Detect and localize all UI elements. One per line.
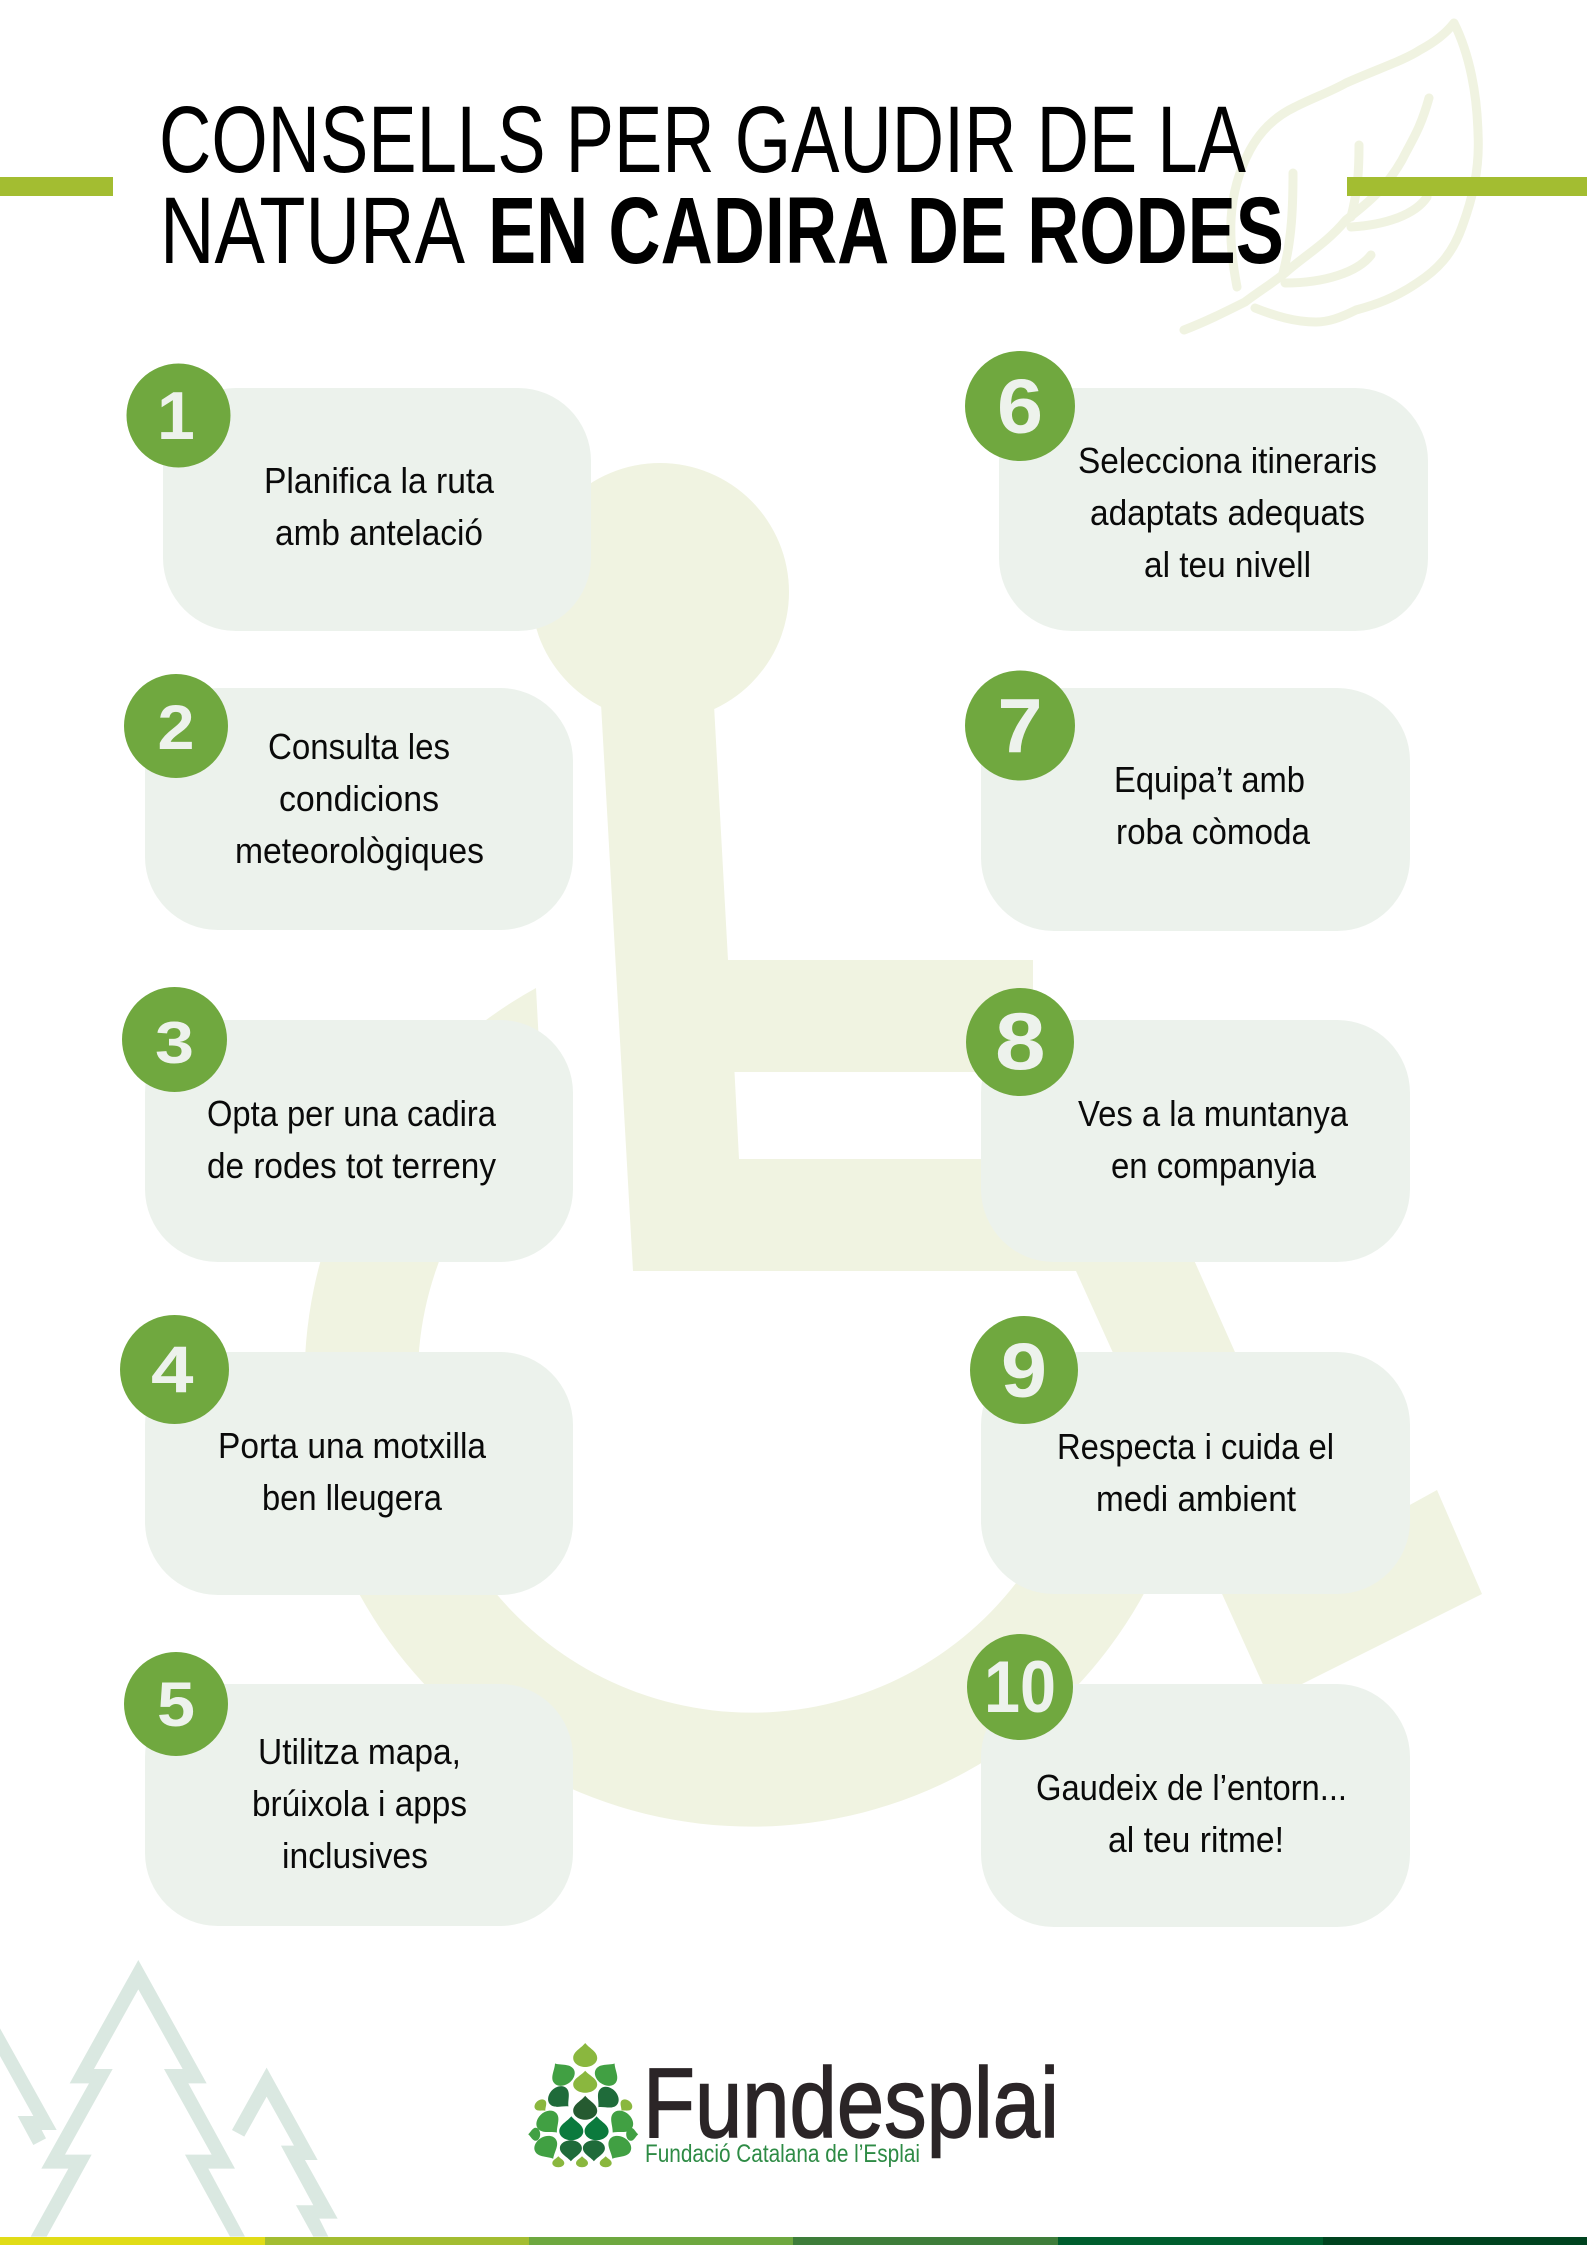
panel: tip 6 xyxy=(965,351,1428,631)
panel: tip 10: 10 xyxy=(984,1647,1056,1728)
panel: tip 4: Porta una motxilla xyxy=(218,1425,487,1466)
left accent bar xyxy=(0,177,113,196)
panel: tip 2: condicions xyxy=(279,778,439,819)
right accent bar xyxy=(1347,177,1587,196)
title: CONSELLS PER GAUDIR DE LA xyxy=(159,87,1246,193)
panel: tip 8: Ves a la muntanya xyxy=(1078,1093,1349,1134)
decorative trees xyxy=(0,1960,338,2237)
title: NATURA xyxy=(160,178,465,284)
panel: tip 8: en companyia xyxy=(1111,1145,1317,1186)
panel: tip 2 xyxy=(124,674,573,930)
background: leaf outline xyxy=(1184,23,1478,330)
panel: tip 10: Gaudeix de l’entorn... xyxy=(1036,1767,1347,1808)
logo wordmark: Fundesplai xyxy=(643,2047,1059,2158)
panel: tip 6: 6 xyxy=(997,364,1043,450)
panel: tip 9: 9 xyxy=(1001,1328,1047,1414)
bottom colour strip xyxy=(0,2237,1587,2245)
panel: tip 2: 2 xyxy=(158,693,194,763)
panel: tip 3 xyxy=(122,987,573,1262)
panel: tip 10: al teu ritme! xyxy=(1108,1819,1284,1860)
panel: tip 7: roba còmoda xyxy=(1116,811,1311,852)
icon: logo leaf cluster xyxy=(528,2043,638,2167)
panel: tip 1: 1 xyxy=(157,378,195,454)
panel: tip 5: 5 xyxy=(157,1670,195,1740)
panel: tip 7: 7 xyxy=(998,684,1042,770)
panel: tip 7 xyxy=(965,670,1410,931)
panel: tip 5 xyxy=(124,1652,573,1926)
panel: tip 9: Respecta i cuida el xyxy=(1057,1426,1334,1467)
panel: tip 6: adaptats adequats xyxy=(1090,492,1365,533)
panel: tip 5: brúixola i apps xyxy=(252,1783,467,1824)
panel: tip 1: amb antelació xyxy=(275,512,483,553)
panel: tip 8: 8 xyxy=(995,997,1046,1087)
panel: tip 6: al teu nivell xyxy=(1144,544,1311,585)
background: wheelchair symbol xyxy=(305,463,1482,1827)
panel: tip 7: Equipa’t amb xyxy=(1114,759,1305,800)
panel: tip 1: Planifica la ruta xyxy=(264,460,495,501)
panel: tip 3: Opta per una cadira xyxy=(207,1093,497,1134)
logo: Fundesplai xyxy=(528,2043,1059,2168)
logo tagline: Fundació Catalana de l’Esplai xyxy=(645,2140,920,2168)
panel: tip 5: inclusives xyxy=(282,1835,428,1876)
panel: tip 4: ben lleugera xyxy=(262,1477,443,1518)
panel: tip 5: Utilitza mapa, xyxy=(258,1731,461,1772)
panel: tip 6: Selecciona itineraris xyxy=(1078,440,1377,481)
panel: tip 8 xyxy=(966,988,1410,1262)
panel: tip 2: Consulta les xyxy=(268,726,450,767)
title xyxy=(159,87,1284,284)
panel: tip 10 xyxy=(967,1634,1410,1927)
panel: tip 9 xyxy=(970,1316,1410,1594)
panel: tip 2: meteorològiques xyxy=(235,830,484,871)
panel: tip 3: 3 xyxy=(155,1010,194,1076)
panel: tip 4: 4 xyxy=(151,1332,194,1406)
title: EN CADIRA DE RODES xyxy=(488,178,1284,284)
panel: tip 1 xyxy=(126,364,591,631)
panel: tip 3: de rodes tot terreny xyxy=(207,1145,496,1186)
panel: tip 9: medi ambient xyxy=(1096,1478,1296,1519)
panel: tip 4 xyxy=(120,1315,573,1595)
